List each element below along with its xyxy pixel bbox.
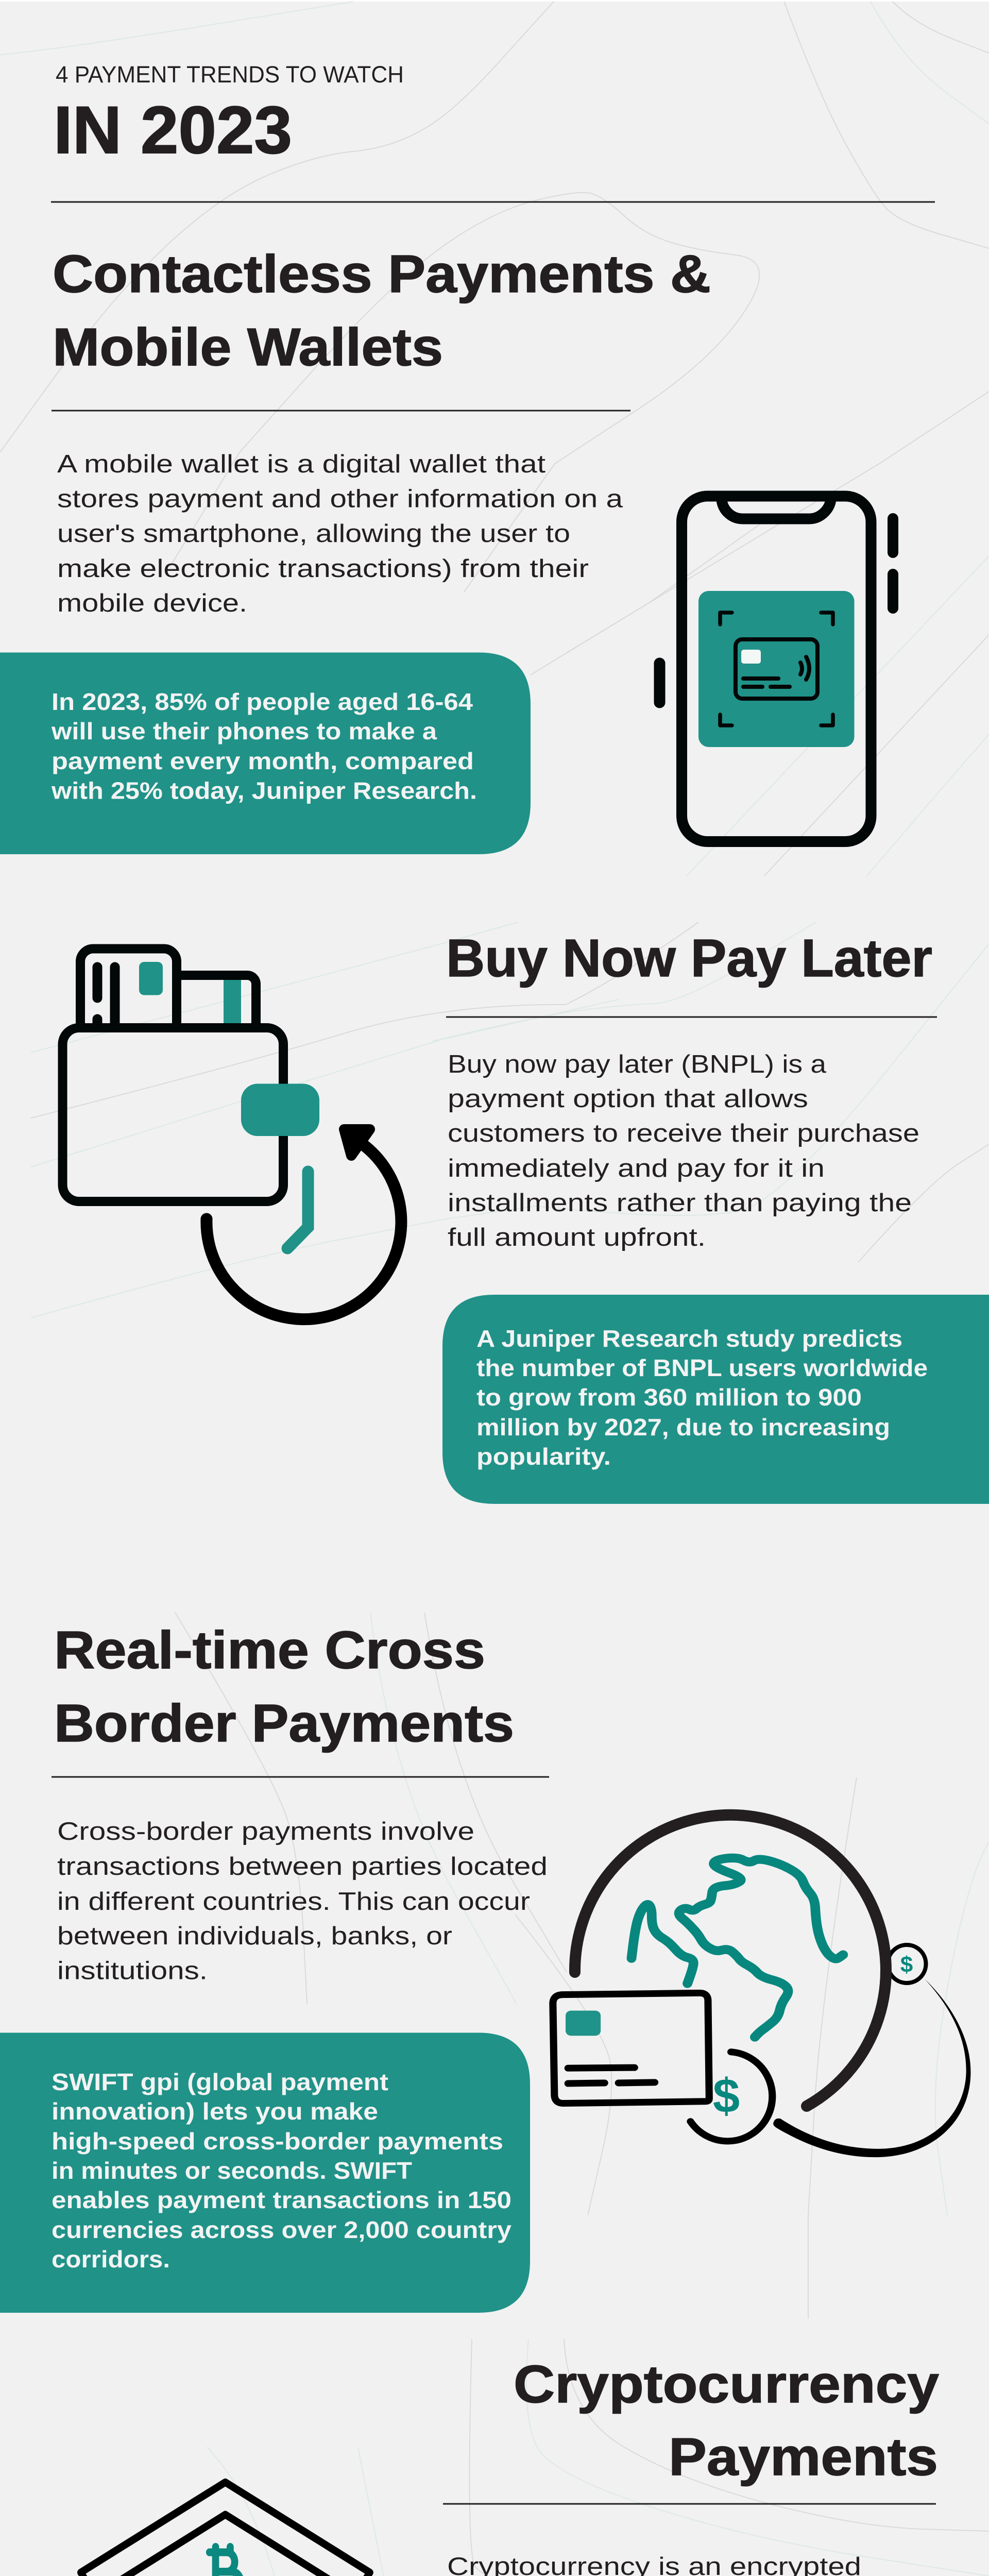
text block: BNPL definition: full amount upfront. bbox=[448, 1224, 706, 1251]
callout: phone usage statistic bbox=[0, 652, 531, 854]
text block: BNPL definition: Buy now pay later (BNPL) is a bbox=[448, 1050, 827, 1078]
text block: mobile wallet definition: A mobile wallet is a digital wallet that bbox=[57, 450, 545, 478]
header bbox=[51, 61, 935, 203]
callout: SWIFT gpi: SWIFT gpi (global payment bbox=[52, 2069, 388, 2095]
heading: buy now pay later: Buy Now Pay Later bbox=[446, 928, 932, 988]
text block: mobile wallet definition: stores payment and other information on a bbox=[57, 485, 623, 513]
callout: SWIFT gpi: high-speed cross-border payments bbox=[52, 2128, 503, 2155]
text block: BNPL definition: installments rather than paying the bbox=[448, 1189, 912, 1217]
icon: globe with card and coins: $ bbox=[713, 2069, 740, 2123]
icon: smartphone scanning a contactless card bbox=[654, 496, 898, 842]
icon: globe with card and coins bbox=[553, 1815, 970, 2157]
callout: phone usage statistic: In 2023, 85% of people aged 16-64 bbox=[52, 688, 473, 715]
heading: cryptocurrency payments: Cryptocurrency bbox=[514, 2354, 939, 2414]
heading: real-time cross border payments bbox=[54, 1620, 514, 1753]
callout: SWIFT gpi: enables payment transactions in 150 bbox=[52, 2187, 511, 2213]
text block: cross-border definition: transactions between parties located bbox=[57, 1853, 548, 1880]
heading: contactless payments: Contactless Payments & bbox=[53, 244, 711, 303]
heading: contactless payments bbox=[53, 244, 711, 377]
callout: phone usage statistic: with 25% today, Juniper Research. bbox=[51, 777, 477, 804]
text block: mobile wallet definition bbox=[57, 450, 623, 617]
title: IN 2023 bbox=[54, 92, 292, 167]
text block: BNPL definition: payment option that allows bbox=[448, 1085, 808, 1113]
panel: buy now pay later bbox=[63, 928, 989, 1504]
heading: real-time cross border payments: Real-time Cross bbox=[54, 1620, 485, 1680]
text block: cross-border definition: in different countries. This can occur bbox=[57, 1888, 530, 1916]
text block: cross-border definition: institutions. bbox=[57, 1957, 208, 1985]
callout: SWIFT gpi: in minutes or seconds. SWIFT bbox=[52, 2157, 412, 2184]
panel: contactless payments and mobile wallets bbox=[0, 244, 898, 854]
heading: cryptocurrency payments: Payments bbox=[669, 2427, 938, 2486]
text block: BNPL definition: immediately and pay for it in bbox=[448, 1155, 825, 1182]
panel: real-time cross border payments bbox=[0, 1620, 970, 2313]
callout: SWIFT gpi bbox=[0, 2033, 530, 2313]
icon: globe with card and coins: $ bbox=[900, 1952, 913, 1977]
icon: bank building with bitcoin symbol bbox=[51, 2482, 400, 2576]
text block: cross-border definition: between individuals, banks, or bbox=[57, 1922, 452, 1950]
callout: phone usage statistic: will use their phones to make a bbox=[51, 718, 437, 744]
text block: cross-border definition: Cross-border payments involve bbox=[57, 1818, 474, 1845]
callout: BNPL users forecast bbox=[442, 1295, 989, 1504]
callout: BNPL users forecast: A Juniper Research study predicts bbox=[476, 1325, 902, 1352]
callout: phone usage statistic: payment every month, compared bbox=[52, 748, 474, 774]
heading: contactless payments: Mobile Wallets bbox=[53, 317, 443, 377]
text block: BNPL definition bbox=[448, 1050, 919, 1251]
icon: wallet with cards and clock arrow bbox=[63, 949, 401, 1319]
title kicker: 4 PAYMENT TRENDS TO WATCH bbox=[56, 61, 404, 88]
callout: SWIFT gpi: corridors. bbox=[52, 2246, 170, 2273]
panel: cryptocurrency payments bbox=[51, 2354, 989, 2576]
callout: BNPL users forecast: million by 2027, due to increasing bbox=[476, 1414, 890, 1440]
heading: real-time cross border payments: Border Payments bbox=[54, 1693, 514, 1753]
callout: BNPL users forecast: to grow from 360 million to 900 bbox=[476, 1384, 862, 1411]
callout: BNPL users forecast: the number of BNPL users worldwide bbox=[476, 1354, 928, 1381]
text block: cross-border definition bbox=[57, 1818, 548, 1985]
text block: BNPL definition: customers to receive their purchase bbox=[448, 1120, 919, 1147]
callout: BNPL users forecast: popularity. bbox=[476, 1443, 611, 1470]
text block: mobile wallet definition: mobile device. bbox=[57, 589, 247, 617]
text block: mobile wallet definition: make electronic transactions) from their bbox=[57, 555, 589, 583]
text block: mobile wallet definition: user's smartphone, allowing the user to bbox=[57, 520, 570, 548]
callout: SWIFT gpi: currencies across over 2,000 country bbox=[52, 2216, 511, 2243]
heading: cryptocurrency payments bbox=[514, 2354, 939, 2486]
callout: SWIFT gpi: innovation) lets you make bbox=[52, 2098, 378, 2125]
